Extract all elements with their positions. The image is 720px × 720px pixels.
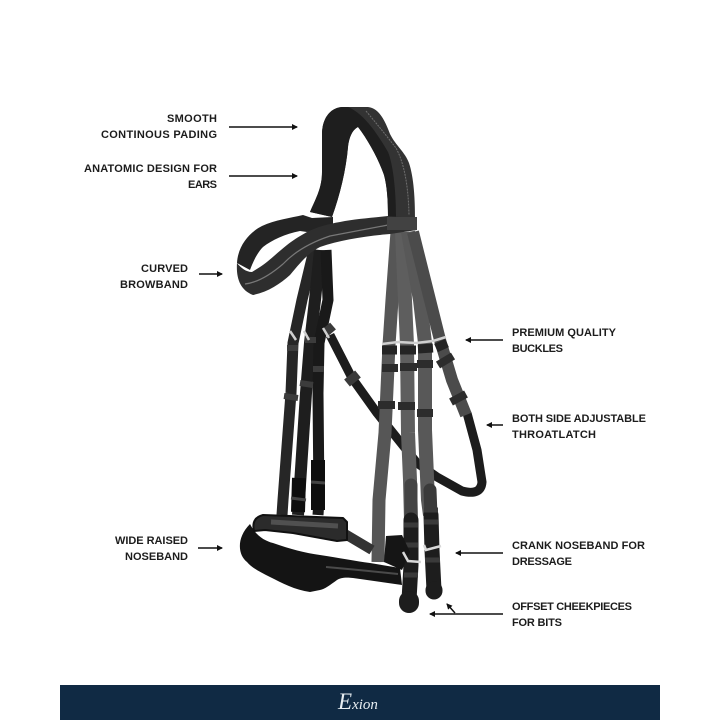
footer logo: Exion	[337, 689, 378, 714]
label: curved browband	[120, 263, 188, 291]
label: premium buckles	[512, 327, 617, 355]
label: wide raised noseband: WIDE RAISED	[115, 535, 188, 547]
strap keepers	[378, 356, 466, 413]
label: offset cheekpieces: OFFSET CHEEKPIECES	[512, 601, 632, 613]
label: crank noseband	[512, 540, 645, 568]
label: premium buckles: PREMIUM QUALITY	[512, 327, 617, 339]
crownpiece	[310, 107, 415, 218]
crown stitching	[366, 111, 409, 215]
buckles	[290, 328, 447, 350]
arrow: crank noseband	[456, 552, 503, 554]
label: wide raised noseband: NOSEBAND	[125, 551, 188, 563]
label: anatomic design	[84, 163, 217, 191]
label: wide raised noseband	[115, 535, 188, 563]
illustration: bridle	[237, 107, 482, 603]
label: offset cheekpieces	[512, 601, 632, 629]
label: throatlatch	[512, 413, 646, 441]
arrow: wide raised noseband	[198, 547, 222, 549]
label: anatomic design: ANATOMIC DESIGN FOR	[84, 163, 217, 175]
label: smooth padding	[101, 113, 217, 141]
right cheek straps	[378, 232, 466, 562]
arrow: premium buckles	[466, 339, 503, 341]
label: smooth padding: SMOOTH	[167, 113, 217, 125]
throatlatch keeper	[326, 326, 358, 383]
browband highlight	[245, 225, 388, 284]
label: curved browband: CURVED	[141, 263, 188, 275]
arrow: throatlatch	[487, 424, 503, 426]
browband back	[237, 215, 333, 270]
arrow: offset cheekpieces	[430, 613, 503, 615]
label: crank noseband: DRESSAGE	[512, 556, 572, 568]
noseband padding highlight	[271, 522, 338, 526]
arrow: smooth padding	[229, 126, 297, 128]
crank strap	[345, 534, 372, 550]
footer bar	[60, 685, 660, 720]
lower cheek ends	[404, 485, 440, 603]
label: crank noseband: CRANK NOSEBAND FOR	[512, 540, 645, 552]
label: throatlatch: THROATLATCH	[512, 429, 596, 441]
arrow: small bit pointer	[447, 604, 455, 613]
noseband highlight	[326, 567, 398, 574]
arrow: anatomic design	[229, 175, 297, 177]
arrow: curved browband	[199, 273, 222, 275]
label: curved browband: BROWBAND	[120, 279, 188, 291]
left cheek straps	[282, 250, 328, 515]
noseband padding	[253, 515, 347, 541]
label: throatlatch: BOTH SIDE ADJUSTABLE	[512, 413, 646, 425]
crown inner padding	[310, 107, 396, 217]
browband front	[237, 216, 417, 295]
throatlatch strap	[330, 335, 482, 492]
label: anatomic design: EARS	[188, 179, 217, 191]
label: premium buckles: BUCKLES	[512, 343, 563, 355]
noseband buckles	[403, 545, 441, 562]
browband keeper	[387, 217, 417, 230]
label: smooth padding: CONTINOUS PADING	[101, 129, 217, 141]
raised noseband	[240, 524, 402, 592]
label: offset cheekpieces: FOR BITS	[512, 617, 562, 629]
dark noseband backing	[384, 535, 410, 570]
